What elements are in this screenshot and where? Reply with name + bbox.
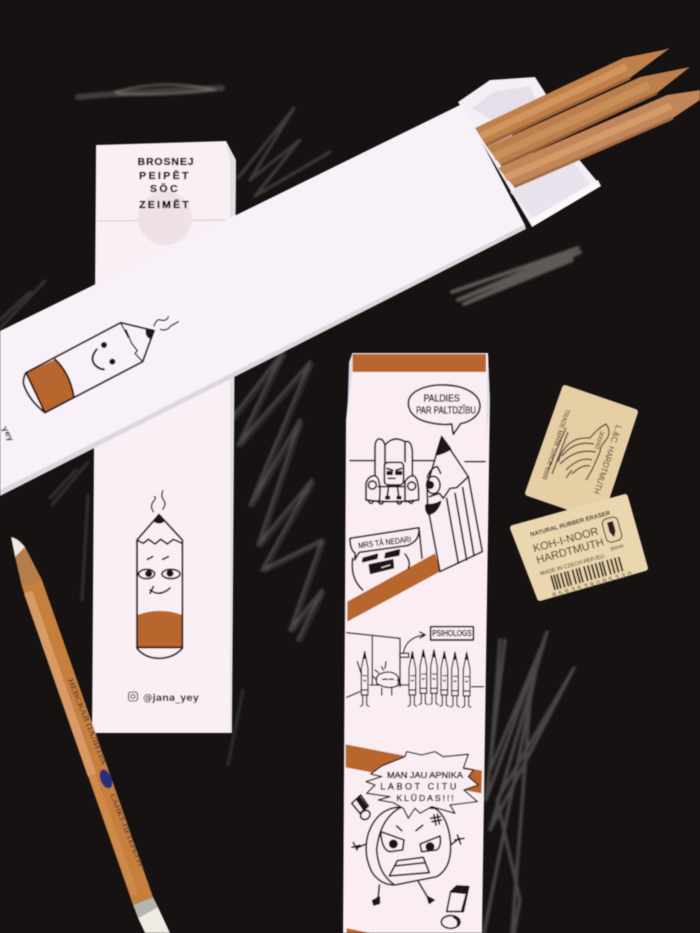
flap text: SŌC <box>150 183 180 195</box>
large pencil box sleeve <box>0 104 526 496</box>
angry eraser with sign <box>350 528 422 590</box>
small eraser shavings icon <box>352 795 372 822</box>
pencil box tray interior <box>458 77 601 227</box>
handle on sleeve edge: yey <box>0 425 16 444</box>
second brown band <box>346 744 482 793</box>
label psihologs: PSIHOLOGS <box>432 628 472 638</box>
speech bubble thanks <box>408 385 480 434</box>
comic strip <box>343 353 490 933</box>
big angry eraser <box>352 806 464 905</box>
elephant engraving <box>548 424 609 480</box>
speech bubble thanks: PALDIES <box>424 394 460 405</box>
strip paper <box>343 353 490 933</box>
shout burst bubble: MAN JAU APNIKA <box>387 770 463 780</box>
eraser block icon <box>441 886 469 928</box>
flap text: PEIPĒT <box>139 170 191 182</box>
eraser: Koh-i-Noor: KOH-I-NOOR <box>532 526 600 555</box>
flap text: BROSNEJ <box>137 156 195 168</box>
comic panel 1 <box>347 385 485 622</box>
instagram handle: @jana_yey <box>143 693 200 704</box>
eraser: L&C Hardtmuth <box>528 388 635 518</box>
eraser: Koh-i-Noor <box>513 497 645 601</box>
pencil 1 <box>475 48 670 147</box>
pencil face illustration <box>137 491 182 658</box>
top brown bar <box>352 354 486 372</box>
eraser: L&C Hardtmuth: L.&C. HARDTMUTH <box>592 424 624 495</box>
paper strip: back of box with title flap <box>92 141 236 733</box>
armchair with small eraser <box>366 439 419 504</box>
white-tipped coloured pencil: САНКТ-ПЕТЕРБУРГ <box>108 793 146 870</box>
eraser: L&C Hardtmuth: TRADE MARK SINCE 1886 <box>540 408 570 481</box>
bottom brown sliver <box>347 928 370 933</box>
pencil brand lettering: НЕВСКАЯ ПАЛИТРА <box>66 677 109 767</box>
flap text: ZEIMĒT <box>139 199 191 211</box>
eraser: Koh-i-Noor: 300/40 <box>610 543 625 552</box>
shout burst bubble: KLŪDAS!!! <box>396 793 454 803</box>
sad eraser in queue <box>357 662 401 695</box>
thumb notch circle <box>138 191 192 245</box>
eraser: Koh-i-Noor: NATURAL RUBBER ERASER <box>530 510 612 538</box>
eraser: Koh-i-Noor: 8593539095330 <box>552 571 633 600</box>
barcode <box>551 557 623 590</box>
sleeve face <box>0 104 525 493</box>
flap text <box>137 156 195 211</box>
pencil brand logo <box>97 768 115 790</box>
strip body <box>92 141 236 733</box>
smiling pencil illustration <box>23 317 178 413</box>
three wooden pencils <box>475 48 700 188</box>
pencil 2 <box>487 67 690 167</box>
shout burst bubble <box>366 752 478 818</box>
white-tipped coloured pencil <box>11 537 170 933</box>
chalk scribbles <box>0 84 580 933</box>
waiting pencils <box>360 650 471 707</box>
large pencil character <box>426 437 482 572</box>
speech bubble thanks: PAR PALTDZĪBU <box>416 406 476 417</box>
shout burst bubble: LABOT CITU <box>380 781 456 791</box>
brown diagonal band <box>347 553 440 622</box>
eraser: L&C Hardtmuth: 300/40 <box>593 430 604 450</box>
pencil 3 <box>498 90 700 188</box>
eraser: Koh-i-Noor: HARDTMUTH <box>535 536 605 567</box>
comic panel 2: psychologist queue <box>347 627 483 707</box>
comic panel 3: angry eraser <box>346 744 482 933</box>
eraser: Koh-i-Noor: MADE IN CZECH REP./EU <box>540 554 605 577</box>
angry eraser with sign: MRS TĀ NEDARI <box>358 535 412 550</box>
arrow to label <box>403 632 425 654</box>
